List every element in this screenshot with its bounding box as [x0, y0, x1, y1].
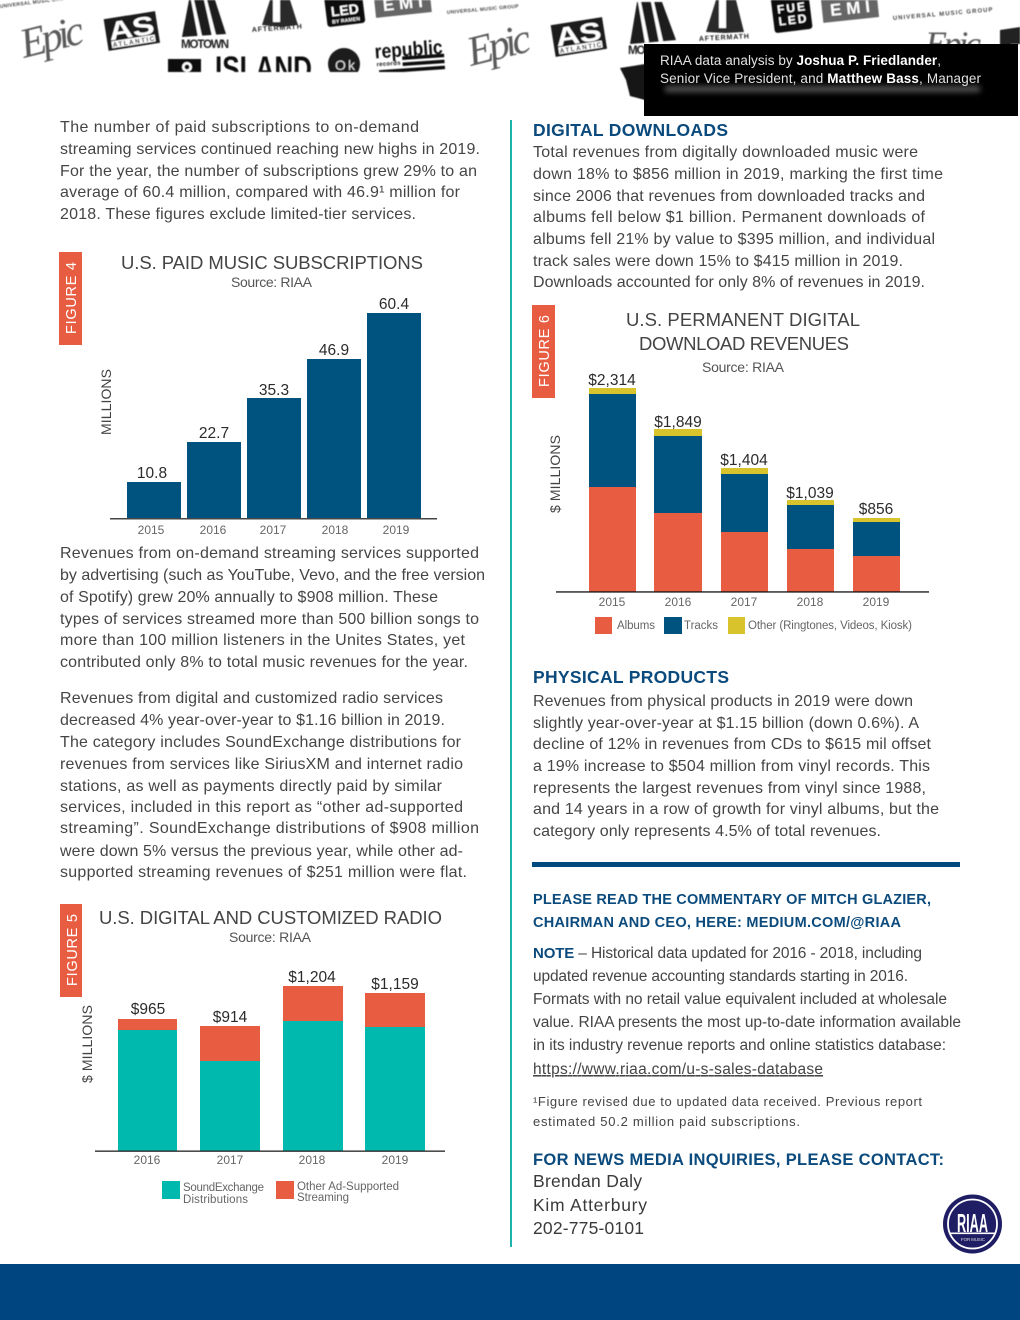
chart: figure 4 paid music subscriptions: [59, 252, 437, 537]
logo: Atlantic repeat: [550, 15, 607, 57]
text block: physical products: [533, 693, 939, 840]
figure 6 years: 2019: [863, 595, 890, 609]
logo: Atlantic repeat: ATLANTIC: [559, 42, 602, 55]
heading: physical products: PHYSICAL PRODUCTS: [533, 667, 729, 687]
figure 6 years: 2018: [797, 595, 824, 609]
figure 5 years: 2018: [299, 1153, 326, 1167]
logo: Republic: records: [376, 61, 401, 68]
figure 5 years: 2017: [217, 1153, 244, 1167]
header: record label logo strip: [0, 0, 1020, 100]
text block: physical products: decline of 12% in revenues from CDs to $615 mil offset: [533, 736, 932, 753]
logo: Atlantic: AS: [106, 10, 156, 46]
text block: subscriptions intro: For the year, the number of subscriptions grew 29% to an: [60, 163, 477, 180]
figure 5 bars: other ad-supported: [118, 986, 425, 1061]
figure 6 legend: Other (Ringtones, Videos, Kiosk): [748, 620, 912, 632]
media contact details: [533, 1171, 647, 1238]
logo: Fueled by Ramen: BY RAMEN: [332, 16, 361, 26]
text block: physical products: represents the largest revenues from vinyl since 1988,: [533, 780, 926, 797]
figure 6 years: 2017: [731, 595, 758, 609]
text block: subscriptions intro: The number of paid subscriptions to on-demand: [60, 119, 419, 136]
text block: digital and customized radio: were down 5% versus the previous year, while other ad-: [59, 843, 463, 860]
figure 6 source: Source: RIAA: [702, 359, 785, 375]
text block: note: [533, 945, 961, 1078]
logo: Atlantic: ATLANTIC: [112, 36, 155, 49]
logo: Motown repeat wordmark: MOTOWN: [628, 45, 676, 57]
text block: ad-supported streaming: of Spotify) grew 20% annually to $908 million. These: [60, 589, 438, 606]
figure 6 values: $1,039: [786, 485, 834, 502]
logo: Aftermath: [252, 0, 302, 34]
logo: Epic repeat: Epic: [461, 16, 536, 76]
text block: digital downloads: albums fell 21% by value to $395 million, and individual: [533, 231, 935, 248]
logo: Motown: MOTOWN: [181, 39, 229, 51]
text block: note: updated revenue accounting standards starting in 2016.: [533, 968, 908, 985]
text block: note: in its industry revenue reports and online statistics database:: [533, 1037, 946, 1054]
link: https://www.riaa.com/u-s-sales-database: [533, 1061, 823, 1078]
media contact details: Brendan Daly: [533, 1171, 642, 1191]
logo: Universal Music Group repeat: UNIVERSAL MUSIC GROUP: [447, 4, 520, 16]
text block: note: Formats with no retail value equivalent included at wholesale: [533, 991, 947, 1008]
figure 5 values: $1,204: [288, 969, 336, 986]
media contact details: 202-775-0101: [533, 1218, 644, 1238]
credit box: [644, 44, 1018, 116]
figure 5 years: 2016: [134, 1153, 161, 1167]
figure 4 values: 22.7: [199, 425, 229, 442]
text block: subscriptions intro: [60, 119, 480, 223]
figure 6 title: DOWNLOAD REVENUES: [639, 333, 849, 354]
figure 6 title: [626, 309, 860, 354]
figure 4 values: 10.8: [137, 465, 167, 482]
figure 5 badge: FIGURE 5: [65, 914, 81, 986]
figure 4 axis: [110, 518, 437, 520]
text block: digital and customized radio: The category includes SoundExchange distributions for: [60, 734, 462, 751]
text block: ad-supported streaming: Revenues from on-demand streaming services supported: [60, 545, 479, 562]
text block: note: value. RIAA presents the most up-to-date information available: [533, 1014, 961, 1031]
figure 6 values: $1,849: [654, 414, 702, 431]
commentary callout: [533, 892, 931, 931]
logo: Roc circle: [327, 47, 361, 73]
icon: RIAA logo: FOR MUSIC: [961, 1237, 986, 1242]
figure 5 values: $914: [213, 1009, 248, 1026]
figure 5 legend: [162, 1181, 399, 1206]
text block: digital downloads: down 18% to $856 million in 2019, marking the first time: [533, 166, 943, 183]
text block: digital and customized radio: supported streaming revenues of $251 million were flat.: [60, 864, 467, 881]
text block: digital and customized radio: revenues from services like SiriusXM and internet radio: [60, 756, 463, 773]
logo: partial Z: [1000, 27, 1020, 60]
text block: note: NOTE – Historical data updated for 2016 - 2018, including: [533, 945, 922, 962]
figure 4 years: [138, 523, 410, 537]
figure 5 axis: [95, 1150, 445, 1152]
text block: subscriptions intro: 2018. These figures exclude limited-tier services.: [60, 206, 416, 223]
figure 5 y-axis label: $ MILLIONS: [79, 1005, 95, 1083]
logo: EMI repeat: [821, 0, 879, 23]
text block: digital and customized radio: services, included in this report as “other ad-supported: [60, 799, 463, 816]
text block: digital downloads: since 2006 that revenues from downloaded tracks and: [533, 188, 925, 205]
text block: digital and customized radio: [59, 690, 479, 881]
figure 4 y-axis label: MILLIONS: [98, 369, 114, 435]
figure 6 values: [588, 372, 893, 518]
text block: physical products: slightly year-over-year at $1.15 billion (down 0.6%). A: [533, 715, 919, 732]
chart: figure 6 permanent digital download revenues: [532, 305, 929, 634]
figure 6 values: $856: [859, 501, 893, 518]
figure 4 bars: [127, 313, 421, 519]
logo: Roc circle: Ok: [335, 57, 356, 73]
figure 4 years: 2016: [200, 523, 227, 537]
text block: digital and customized radio: streaming”. SoundExchange distributions of $908 million: [60, 820, 479, 837]
logo: Republic: [374, 37, 445, 74]
logo: Epic: Epic: [14, 8, 89, 68]
icon: RIAA logo: RIAA: [957, 1208, 988, 1238]
logo: Atlantic repeat: AS: [553, 16, 603, 52]
figure 6 bars: other: [589, 388, 900, 522]
text block: physical products: category only represents 4.5% of total revenues.: [533, 823, 881, 840]
media contact details: Kim Atterbury: [533, 1195, 647, 1215]
text block: digital downloads: [533, 144, 943, 291]
text block: ad-supported streaming: more than 100 million listeners in the Unites States, yet: [60, 632, 466, 649]
text block: subscriptions intro: average of 60.4 million, compared with 46.9¹ million for: [60, 184, 461, 201]
section rule: [532, 862, 960, 867]
footnote: ¹Figure revised due to updated data received. Previous report: [533, 1094, 922, 1109]
text block: digital and customized radio: stations, as well as payments directly paid by similar: [60, 778, 443, 795]
text block: digital downloads: Downloads accounted for only 8% of revenues in 2019.: [533, 274, 925, 291]
figure 6 years: 2016: [665, 595, 692, 609]
figure 6 badge: FIGURE 6: [537, 315, 553, 387]
figure 6 y-axis label: $ MILLIONS: [547, 435, 563, 513]
figure 6 years: 2015: [599, 595, 626, 609]
text block: digital and customized radio: Revenues from digital and customized radio services: [60, 690, 443, 707]
figure 6 bars: tracks: [589, 394, 900, 556]
figure 5 legend: Other Ad-Supported: [297, 1181, 399, 1193]
figure 6 legend: Albums: [617, 620, 655, 632]
figure 5 years: [134, 1153, 409, 1167]
figure 4 years: 2015: [138, 523, 165, 537]
commentary callout: PLEASE READ THE COMMENTARY OF MITCH GLAZIER,: [533, 892, 931, 908]
figure 6 values: $2,314: [588, 372, 636, 389]
logo: EMI: [373, 0, 432, 18]
figure 5 bars: SoundExchange: [118, 1021, 425, 1151]
figure 6 years: [599, 595, 890, 609]
figure 5 values: $965: [131, 1001, 165, 1018]
figure 5 values: [131, 969, 419, 1026]
footnote: estimated 50.2 million paid subscriptions.: [533, 1114, 800, 1129]
figure 6 bars: albums: [589, 487, 900, 592]
text block: ad-supported streaming: types of services streamed more than 500 billion songs to: [60, 611, 479, 628]
blurred text ghost: [665, 86, 980, 92]
credit line 1: RIAA data analysis by Joshua P. Friedlander,: [660, 53, 941, 68]
figure 4 years: 2018: [322, 523, 349, 537]
column divider: [510, 120, 512, 1247]
text block: physical products: Revenues from physical products in 2019 were down: [533, 693, 913, 710]
figure 4 badge: FIGURE 4: [64, 262, 80, 334]
logo: Island: ISLAND: [215, 50, 312, 88]
logo: Motown: [181, 0, 229, 51]
figure 5 values: $1,159: [371, 976, 419, 993]
figure 6 axis: [556, 591, 929, 593]
logo: Motown repeat: [630, 2, 676, 44]
text block: digital downloads: track sales were down 15% to $415 million in 2019.: [533, 253, 903, 270]
figure 5 legend: Distributions: [183, 1194, 248, 1206]
logo: Aftermath repeat: [699, 0, 749, 43]
footer band: [0, 1264, 1020, 1320]
figure 4 title: U.S. PAID MUSIC SUBSCRIPTIONS: [121, 252, 423, 273]
logo: Fueled by Ramen repeat: [771, 0, 813, 33]
logo: Aftermath repeat: AFTERMATH: [699, 33, 749, 43]
text block: physical products: and 14 years in a row of growth for vinyl albums, but the: [533, 801, 939, 818]
figure 4 years: 2017: [260, 523, 287, 537]
figure 6 values: $1,404: [720, 452, 768, 469]
figure 4 badge: [59, 252, 82, 345]
figure 5 legend: SoundExchange: [183, 1182, 264, 1194]
figure 6 title: U.S. PERMANENT DIGITAL: [626, 309, 860, 330]
footnote: [533, 1094, 922, 1129]
logo: Atlantic: [103, 9, 160, 51]
logo: Republic: republic: [374, 37, 443, 63]
chart: figure 5 digital and customized radio: [60, 904, 445, 1206]
logo: Fueled by Ramen: [324, 0, 365, 27]
credit line 2: Senior Vice President, and Matthew Bass, Manager: [660, 71, 982, 86]
logo: Aftermath: AFTERMATH: [252, 24, 302, 34]
logo: Island repeat sliver: [620, 64, 645, 100]
logo: Epic third: Epic: [924, 24, 981, 64]
text block: ad-supported streaming: by advertising (such as YouTube, Vevo, and the free version: [60, 567, 485, 584]
figure 5 title: U.S. DIGITAL AND CUSTOMIZED RADIO: [99, 907, 442, 928]
text block: digital and customized radio: decreased 4% year-over-year to $1.16 billion in 2019.: [60, 712, 445, 729]
figure 4 source: Source: RIAA: [231, 274, 313, 290]
text block: ad-supported streaming: [60, 545, 485, 671]
figure 5 years: 2019: [382, 1153, 409, 1167]
logo: Fueled by Ramen: LED: [330, 0, 360, 20]
text block: subscriptions intro: streaming services continued reaching new highs in 2019.: [60, 141, 480, 158]
figure 4 values: 60.4: [379, 296, 409, 313]
text block: physical products: a 19% increase to $504 million from vinyl records. This: [533, 758, 930, 775]
commentary callout: CHAIRMAN AND CEO, HERE: MEDIUM.COM/@RIAA: [533, 915, 902, 931]
figure 5 legend: Streaming: [297, 1192, 349, 1204]
media contact heading: FOR NEWS MEDIA INQUIRIES, PLEASE CONTACT:: [533, 1151, 944, 1169]
figure 4 values: 46.9: [319, 342, 349, 359]
logo: Island box: [168, 59, 201, 74]
text block: digital downloads: albums fell below $1 billion. Permanent downloads of: [533, 209, 926, 226]
heading: digital downloads: DIGITAL DOWNLOADS: [533, 120, 728, 140]
figure 5 badge: [60, 904, 82, 997]
figure 6 legend: [595, 617, 912, 634]
figure 6 legend: Tracks: [684, 620, 718, 632]
text block: ad-supported streaming: contributed only 8% to total music revenues for the year.: [60, 654, 468, 671]
text block: digital downloads: Total revenues from digitally downloaded music were: [533, 144, 918, 161]
figure 6 badge: [532, 305, 555, 398]
figure 4 values: 35.3: [259, 382, 289, 399]
figure 5 source: Source: RIAA: [229, 929, 312, 945]
figure 4 years: 2019: [383, 523, 410, 537]
figure 4 values: [137, 296, 409, 482]
icon: RIAA logo: [943, 1194, 1002, 1254]
logo: Fueled by Ramen repeat: LED: [778, 11, 808, 29]
logo: Universal Music Group third: UNIVERSAL MUSIC GROUP: [893, 7, 993, 22]
